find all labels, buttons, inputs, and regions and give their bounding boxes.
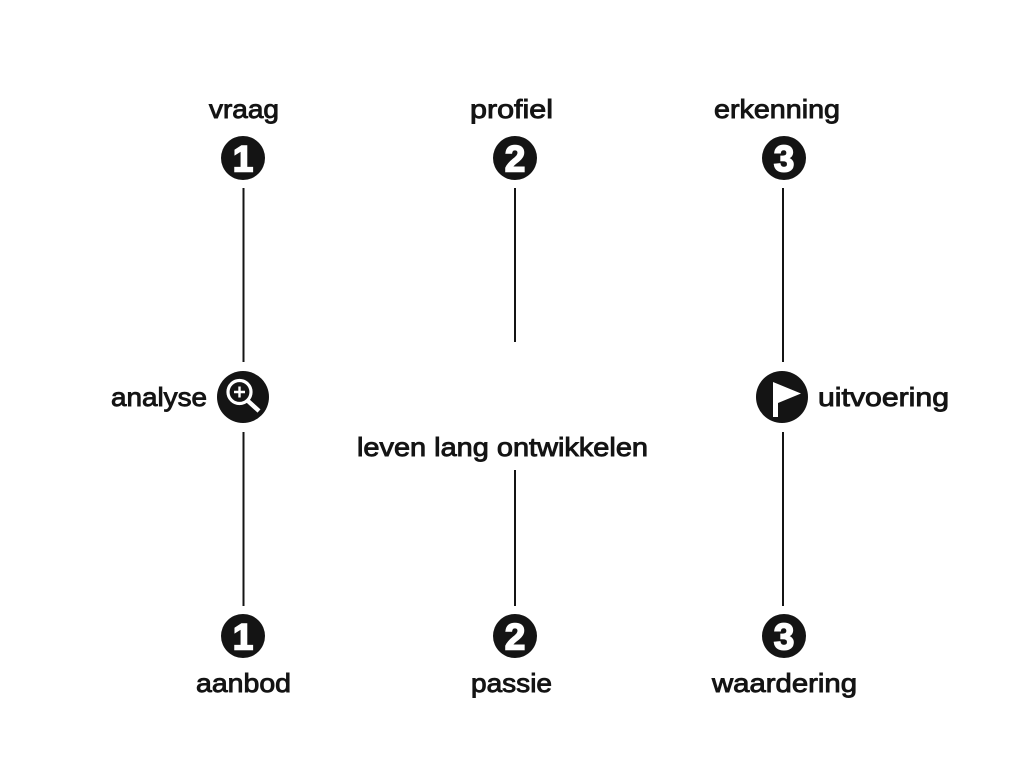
line: vraag to analyse: [242, 188, 244, 362]
badge: number 2 bottom: [493, 614, 537, 658]
label: uitvoering: uitvoering: [818, 382, 949, 412]
icon: flag: [756, 371, 808, 423]
badge: number 3 top: 3: [774, 138, 794, 180]
line: erkenning to uitvoering: [782, 188, 784, 362]
badge: number 1 bottom: 1: [233, 616, 253, 658]
badge: number 3 bottom: [762, 614, 806, 658]
label: passie: passie: [471, 668, 552, 698]
column 1: vraag to aanbod: [111, 94, 291, 698]
label: aanbod: aanbod: [196, 668, 291, 698]
line: centre to passie: [514, 470, 516, 606]
badge: number 1 top: 1: [233, 138, 253, 180]
badge: number 3 bottom: 3: [774, 616, 794, 658]
badge: number 2 bottom: 2: [505, 616, 525, 658]
badge: number 1 top: [221, 136, 265, 180]
badge: number 1 bottom: [221, 614, 265, 658]
badge: number 3 top: [762, 136, 806, 180]
label: waardering: waardering: [711, 668, 857, 698]
badge: number 2 top: 2: [505, 138, 525, 180]
label: analyse: analyse: [111, 382, 207, 412]
column 3: erkenning to waardering: [711, 94, 949, 698]
badge: number 2 top: [493, 136, 537, 180]
label: vraag: vraag: [209, 94, 279, 124]
line: profiel to centre: [514, 188, 516, 342]
label: profiel: profiel: [470, 94, 553, 124]
icon: magnifying glass: [217, 371, 269, 423]
line: uitvoering to waardering: [782, 432, 784, 606]
label: leven lang ontwikkelen: leven lang ontwikkelen: [357, 432, 648, 462]
label: erkenning: erkenning: [714, 94, 840, 124]
column 2: profiel to passie: [357, 94, 648, 698]
line: analyse to aanbod: [242, 432, 244, 606]
